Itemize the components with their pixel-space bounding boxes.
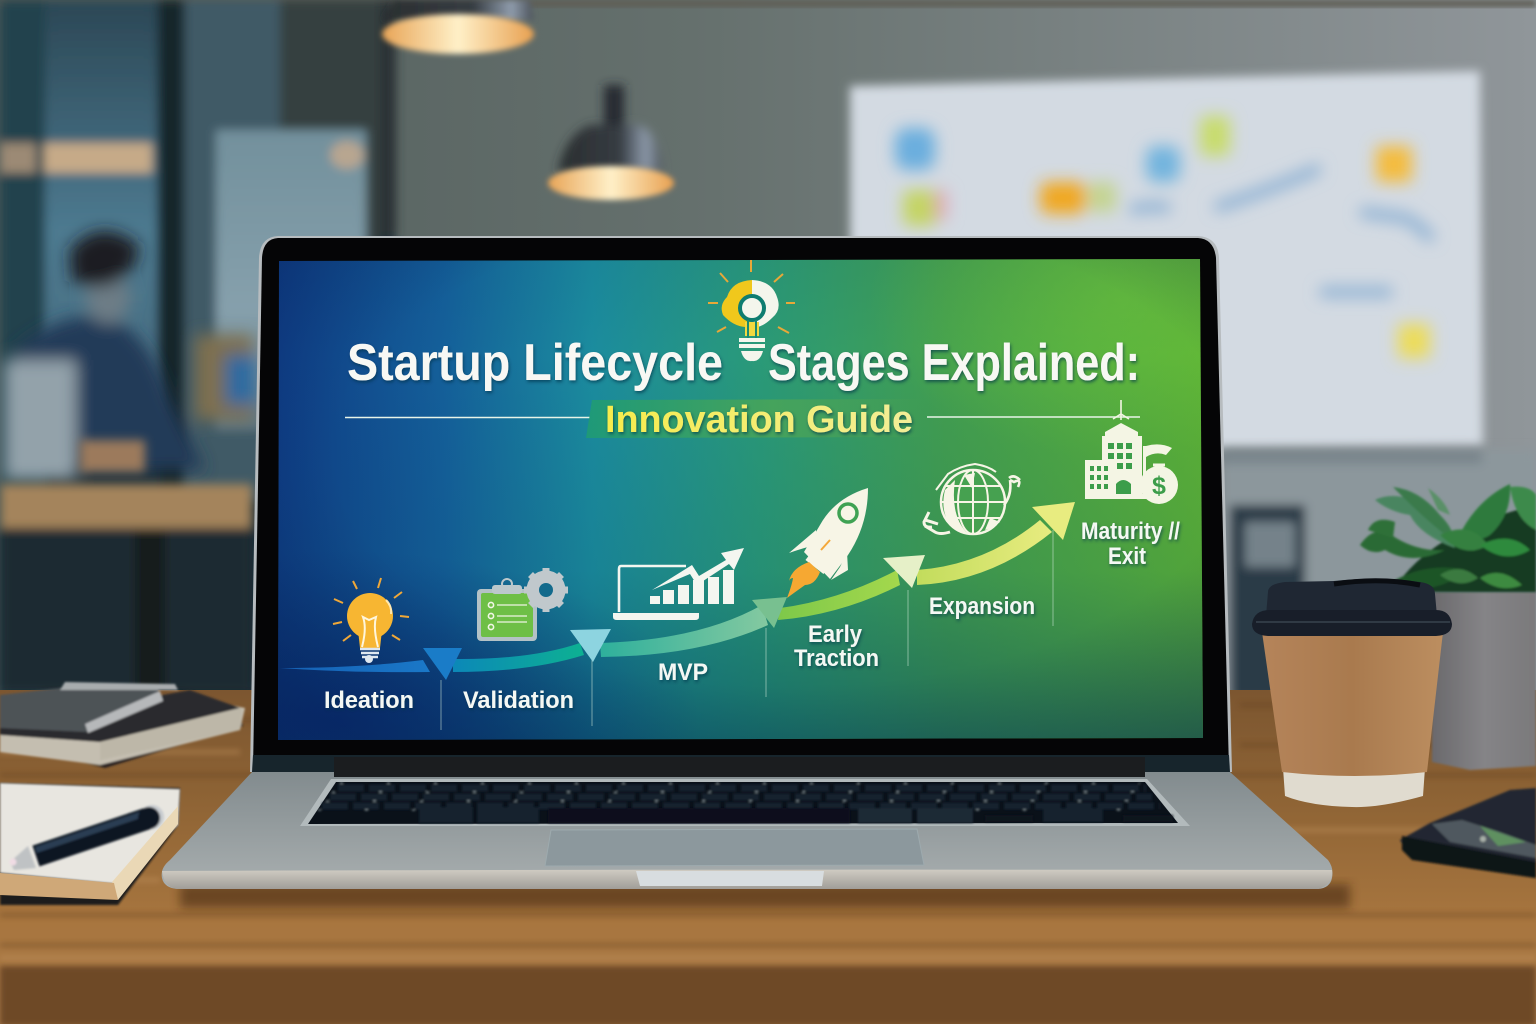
icon: rocket [787, 488, 868, 598]
label: MVP: MVP [658, 659, 708, 686]
laptop base deck [162, 772, 1333, 889]
label: expansion: Expansion [929, 593, 1035, 620]
coffee cup [1252, 579, 1452, 807]
background: windows on the left [0, 0, 396, 700]
icon: maturity office building with money bag: $ [1152, 472, 1166, 500]
blurred office background [0, 0, 1536, 700]
front notch [636, 871, 824, 886]
wooden desk [0, 690, 1536, 1024]
label: maturity and exit: Exit [1108, 543, 1146, 570]
plant leaves [1360, 484, 1536, 592]
cup black lid [1252, 579, 1452, 636]
label: early traction: Traction [794, 645, 879, 672]
icon: ideation light bulb [333, 578, 409, 663]
label: early traction [794, 621, 879, 672]
laptop shadow [180, 884, 1350, 908]
subtitle banner: Innovation Guide [605, 399, 913, 441]
stage marker triangles [423, 555, 925, 680]
label: maturity and exit: Maturity // [1081, 518, 1180, 545]
icon: MVP laptop with growth chart [613, 548, 744, 620]
desk front edge [0, 966, 1536, 1024]
title: Stages Explained: [768, 334, 1140, 392]
laptop screen [278, 259, 1203, 740]
icon: validation clipboard and gear [477, 568, 568, 641]
label: early traction: Early [808, 621, 863, 648]
icon: expansion globe [924, 464, 1020, 534]
potted plant [1360, 484, 1536, 770]
notebook with pen [0, 783, 180, 905]
title: Startup Lifecycle [347, 334, 723, 392]
background: person working at a table [0, 231, 255, 695]
stage labels [324, 518, 1180, 714]
icon: title light bulb with head [708, 260, 795, 361]
background: ceiling lamp two [548, 85, 674, 200]
title [347, 334, 1140, 392]
laptop lid and bezel [250, 236, 1232, 777]
subtitle banner [345, 399, 1140, 441]
label: ideation: Ideation [324, 687, 414, 714]
growth arrow path [280, 502, 1075, 730]
growth arrow head [1032, 502, 1075, 540]
pen on the notebook [10, 805, 164, 870]
background: whiteboard with sticky notes [850, 71, 1483, 452]
keyboard [300, 779, 1190, 826]
stacked books and tablet [0, 682, 245, 768]
background: lower right wall and chair [1222, 450, 1536, 700]
gear [524, 568, 568, 612]
trackpad [545, 829, 924, 866]
icon: maturity office building with money bag [1085, 400, 1178, 504]
label: validation: Validation [463, 687, 574, 714]
background: ceiling lamp one [382, 0, 534, 54]
laptop [162, 236, 1355, 913]
smartphone [1400, 788, 1536, 878]
label: maturity and exit [1081, 518, 1180, 570]
